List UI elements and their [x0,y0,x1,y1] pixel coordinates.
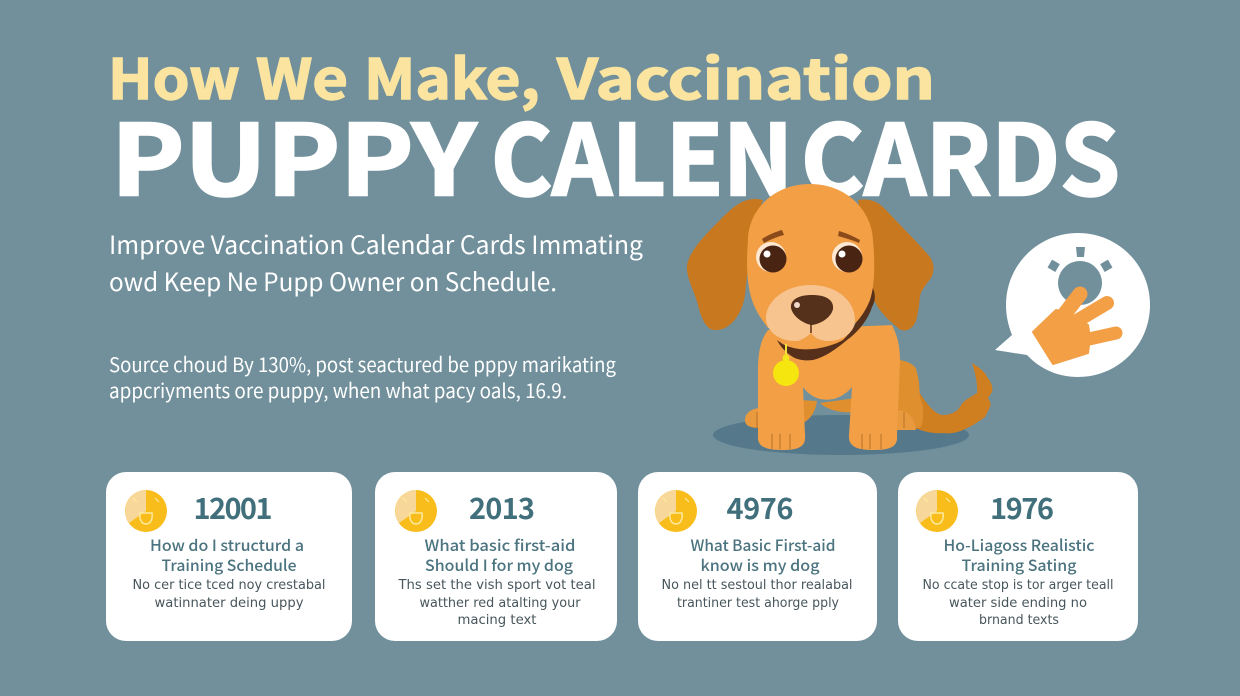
icon: pie face [655,490,697,532]
card 3: know is my dog [700,554,820,576]
back foot left [745,408,762,428]
illustration: puppy [687,184,992,455]
number: 4976 [726,486,794,528]
title line 2 [111,82,1120,223]
dial ticks [1048,247,1112,272]
eye right [832,242,862,272]
description text [109,349,616,404]
card 2 [375,472,617,641]
title line 2: CARDS [801,82,1120,223]
question: What basic first-aid [424,534,576,556]
mouth [810,323,812,333]
title line 1: We [256,35,348,115]
speech bubble with hand icon [995,233,1150,377]
toes [757,412,904,449]
number: 2013 [469,486,535,528]
title line 1: Make, [364,35,540,115]
card 4: water side ending no [949,595,1087,611]
description: No cer tice tced noy crestabal [132,577,326,593]
icon: pie face [395,490,437,532]
question: How do I structurd a [150,534,304,556]
title line 2: PUPPY [111,82,477,223]
card 1: watinnater deing uppy [154,595,304,611]
card 4: brnand texts [979,612,1059,628]
collar [777,288,875,360]
title line 1 [108,35,935,115]
number: 12001 [194,486,272,528]
card 2: watther red atalting your [420,595,581,611]
card 2: macing text [458,612,536,628]
tail [915,363,992,433]
number: 1976 [990,486,1054,528]
title line 2: CALEN [491,82,793,223]
haunch [890,360,923,430]
chin [800,333,826,344]
title line 1: How [108,35,240,115]
back leg shade [798,400,817,424]
description: Ths set the vish sport vot teal [398,577,596,593]
back foot right [893,410,916,430]
question: Ho-Liagoss Realistic [944,534,1094,556]
icon: pie face [125,490,167,532]
card 3: trantiner test ahorge pply [677,595,839,611]
tag [773,344,799,386]
dial circle [1058,261,1102,305]
description text: appcriyments ore puppy, when what pacy oals, 16.9. [109,375,567,404]
description text: Source choud By 130%, post seactured be pppy marikating [109,349,616,378]
nose [791,295,833,325]
question: What Basic First-aid [690,534,836,556]
description: No nel tt sestoul thor realabal [662,577,852,593]
eye left [756,242,786,272]
bubble [995,233,1150,377]
subtitle: owd Keep Ne Pupp Owner on Schedule. [109,263,557,299]
eyebrows [762,230,784,243]
icon: pie face [916,490,958,532]
subtitle [109,226,643,299]
body and front legs [758,325,900,450]
card 4: Training Sating [962,554,1077,576]
hand [1033,294,1116,364]
description: No ccate stop is tor arger teall [922,577,1114,593]
muzzle [766,285,855,341]
card 4 [898,472,1138,641]
card 3 [638,472,877,641]
card 1 [106,472,352,641]
head [747,184,874,328]
ground shadow [713,415,969,455]
ear right [858,199,934,330]
ear left [687,199,763,330]
card 2: Should I for my dog [425,554,573,576]
subtitle: Improve Vaccination Calendar Cards Immating [109,226,643,262]
card 1: Training Schedule [162,554,297,576]
title line 1: Vaccination [556,35,935,115]
